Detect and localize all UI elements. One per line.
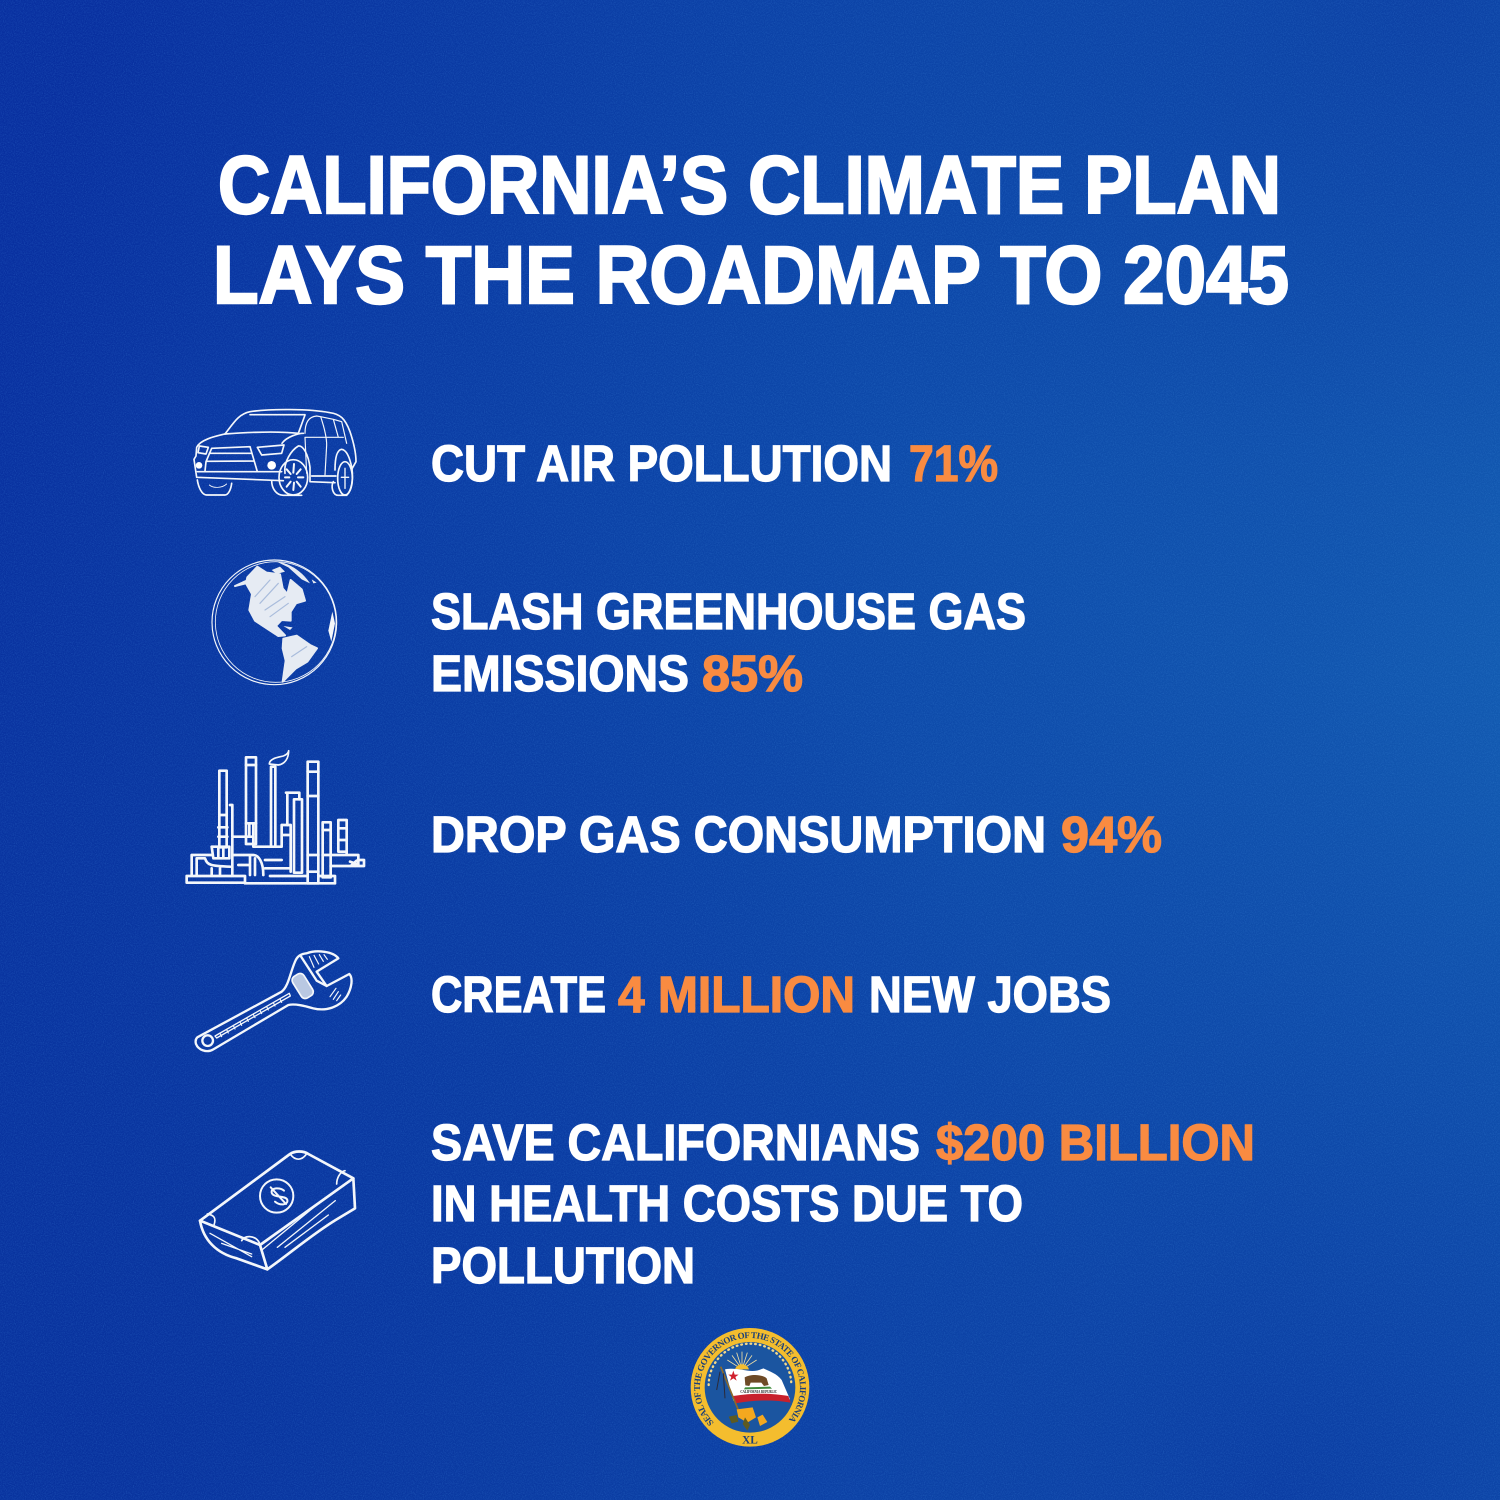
row 5: health costs: POLLUTION (431, 1237, 695, 1294)
icon: stack of money (200, 1151, 355, 1269)
icon: wrench (196, 951, 352, 1051)
icon: globe (212, 560, 337, 685)
africa edge (328, 612, 335, 642)
row 2: greenhouse gas: 85% (702, 645, 803, 702)
title: LAYS THE ROADMAP TO 2045 (213, 230, 1289, 321)
seal of the governor: SEAL OF THE GOVERNOR OF THE STATE OF CALIFORNIA (694, 1332, 806, 1426)
title (213, 140, 1289, 321)
row 4: jobs: NEW JOBS (869, 966, 1111, 1023)
icon: refinery (187, 751, 364, 883)
row 3: gas consumption: 94% (1061, 806, 1162, 863)
south america (283, 636, 317, 682)
row 2: greenhouse gas: EMISSIONS (431, 645, 689, 702)
row 2: greenhouse gas (431, 583, 1026, 702)
row 2: greenhouse gas: SLASH GREENHOUSE GAS (431, 583, 1026, 640)
seal of the governor: XL (742, 1434, 758, 1446)
row 4: jobs: 4 MILLION (618, 966, 855, 1023)
row 5: health costs: $200 BILLION (936, 1114, 1255, 1171)
row 5: health costs: IN HEALTH COSTS DUE TO (431, 1175, 1023, 1232)
row 5: health costs (431, 1114, 1255, 1294)
row 1: air pollution: 71% (909, 435, 998, 492)
row 4: jobs (431, 966, 1111, 1023)
title: CALIFORNIA’S CLIMATE PLAN (218, 140, 1281, 231)
row 1: air pollution: CUT AIR POLLUTION (431, 435, 892, 492)
seal of the governor: CALIFORNIA REPUBLIC (740, 1389, 777, 1394)
arctic islands (272, 562, 317, 630)
row 4: jobs: CREATE (431, 966, 606, 1023)
row 3: gas consumption: DROP GAS CONSUMPTION (431, 806, 1046, 863)
row 5: health costs: SAVE CALIFORNIANS (431, 1114, 920, 1171)
icon: car (194, 410, 356, 495)
north america (235, 567, 305, 636)
